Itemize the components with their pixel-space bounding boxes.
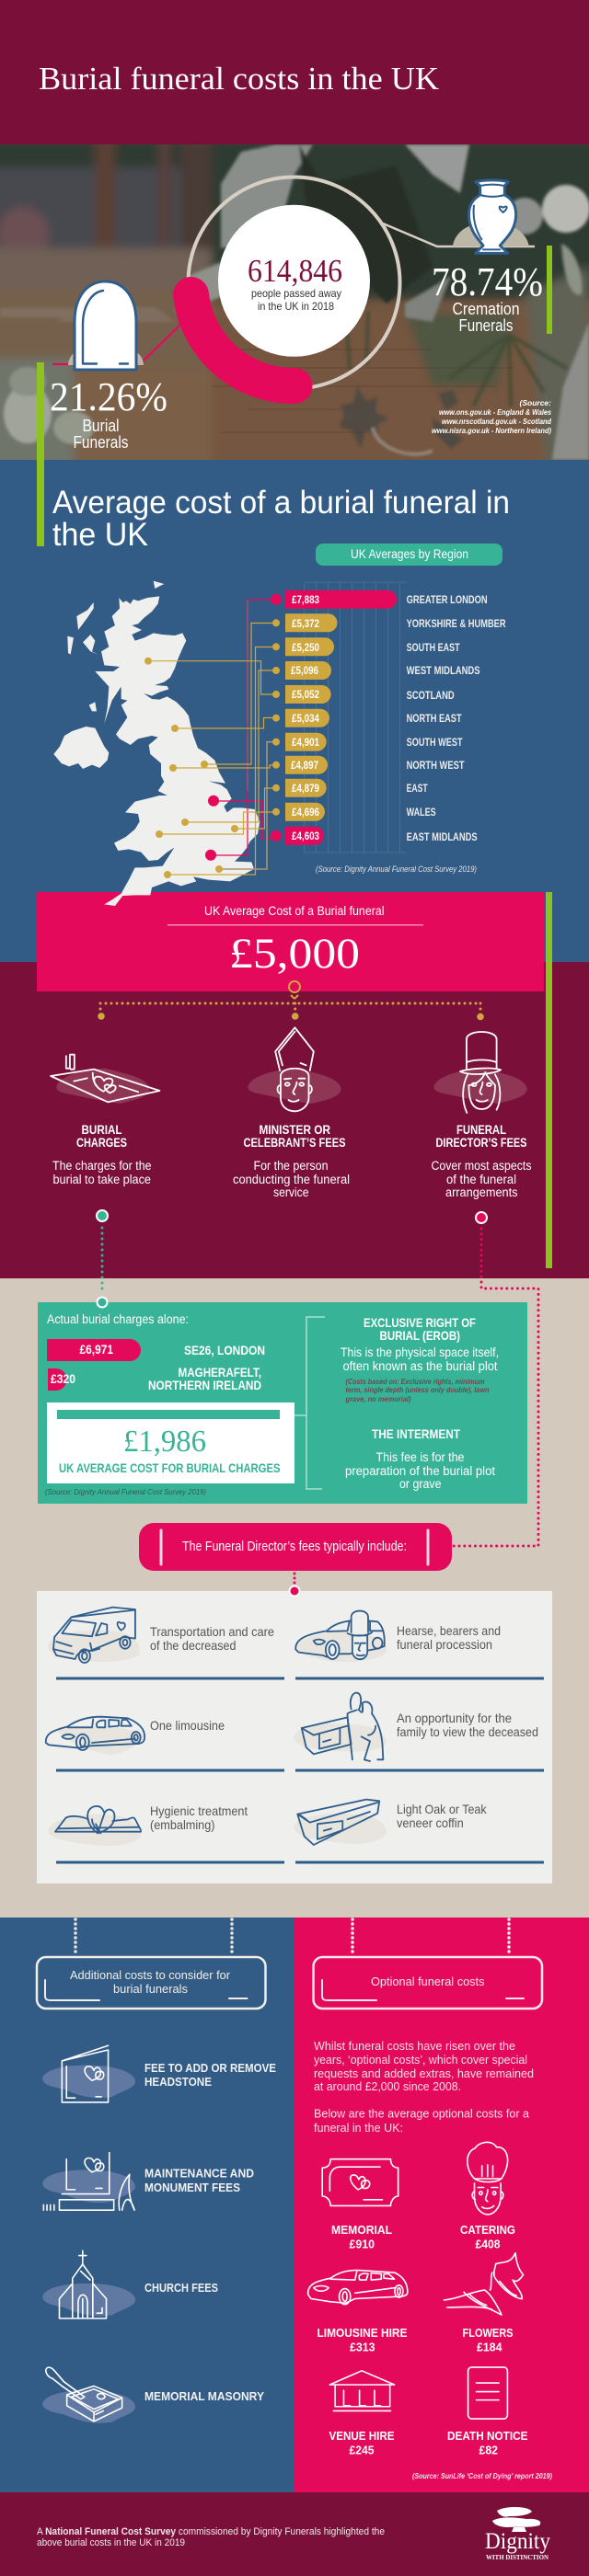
- bar chart: regions: YORKSHIRE & HUMBER: [407, 617, 506, 630]
- director fees: Cover most aspects: [431, 1159, 532, 1173]
- fee item text: of the decreased: [150, 1638, 236, 1653]
- pill: director fees: [139, 1523, 452, 1571]
- bar chart: regions: SCOTLAND: [407, 689, 455, 702]
- gold tree connector: [98, 981, 484, 1020]
- burial arc: [191, 294, 294, 386]
- additional cost labels: MONUMENT FEES: [144, 2181, 240, 2194]
- bar chart: regions: EAST MIDLANDS: [407, 830, 478, 843]
- optional cost labels: £82: [479, 2444, 498, 2457]
- region pill: UK Averages by Region: [351, 546, 468, 561]
- director fees: FUNERAL: [456, 1123, 506, 1137]
- bar chart: regions: £5,250: [292, 641, 319, 654]
- heading: average cost: Average cost of a burial funeral in: [52, 485, 510, 521]
- icon: limousine outline: [308, 2271, 408, 2305]
- fee item text: veneer coffin: [397, 1815, 464, 1830]
- fee item text: family to view the deceased: [397, 1724, 538, 1739]
- panel: additional costs: [0, 1918, 294, 2492]
- erob text: often known as the burial plot: [342, 1359, 498, 1373]
- icon: minister: [248, 1027, 341, 1111]
- interment text: THE INTERMENT: [372, 1426, 460, 1441]
- heading box: Additional costs to consider for: [70, 1969, 230, 1982]
- icon: church: [42, 2250, 135, 2318]
- fee item text: Hearse, bearers and: [397, 1623, 501, 1638]
- minister fees: conducting the funeral: [233, 1173, 350, 1186]
- fee item text: Transportation and care: [150, 1624, 274, 1639]
- intro text: at around £2,000 since 2008.: [314, 2080, 461, 2093]
- bar chart: regions: £4,879: [292, 782, 319, 795]
- bar chart: regions: £4,603: [292, 830, 319, 842]
- average cost card: UK AVERAGE COST FOR BURIAL CHARGES: [59, 1460, 280, 1475]
- average cost card: £1,986: [123, 1425, 206, 1459]
- survey note: A National Funeral Cost Survey commissioned by Dignity Funerals highlighted the: [37, 2526, 385, 2537]
- erob note: term, single depth (unless only double), lawn: [346, 1386, 490, 1394]
- bar: lowest: £320: [51, 1372, 75, 1386]
- minister fees: CELEBRANT’S FEES: [243, 1136, 346, 1150]
- bar chart: regions: £4,696: [292, 806, 319, 819]
- fee item text: Hygienic treatment: [150, 1803, 248, 1818]
- bar chart: regions: EAST: [407, 782, 428, 795]
- bar chart: regions: WEST MIDLANDS: [407, 664, 480, 677]
- cremation stat: Cremation: [453, 300, 519, 318]
- optional cost labels: LIMOUSINE HIRE: [317, 2327, 407, 2340]
- panel: funeral photo background: [0, 138, 589, 469]
- optional cost labels: FLOWERS: [462, 2327, 514, 2340]
- region pill: [316, 544, 502, 566]
- panel: optional costs: [294, 1918, 589, 2492]
- erob text: EXCLUSIVE RIGHT OF: [364, 1315, 476, 1330]
- bar chart: regions: £5,034: [292, 712, 319, 725]
- panel: UK average cost: [37, 892, 552, 1268]
- optional cost labels: £184: [477, 2341, 502, 2354]
- burial stat: 21.26%: [50, 374, 167, 419]
- bar: highest: £6,971: [79, 1343, 113, 1357]
- bar chart: regions: SOUTH EAST: [407, 641, 460, 654]
- optional cost labels: VENUE HIRE: [329, 2430, 394, 2443]
- panel: director fee items: [37, 1574, 552, 1883]
- minister fees: For the person: [254, 1159, 328, 1173]
- connector: cremation: [383, 223, 535, 246]
- erob text: [341, 1315, 499, 1373]
- fee item text: One limousine: [150, 1718, 225, 1733]
- logo: Dignity: Dignity: [485, 2529, 550, 2554]
- map connectors: [148, 600, 276, 875]
- bar chart: regions: NORTH WEST: [407, 759, 465, 772]
- icon: venue: [329, 2371, 395, 2410]
- heading box: [313, 1957, 542, 2009]
- cremation stat: 78.74%: [432, 259, 543, 304]
- total cost: £5,000: [229, 930, 360, 978]
- optional cost labels: MEMORIAL: [331, 2224, 392, 2237]
- heading: average cost: the UK: [52, 517, 148, 553]
- bar chart: regions: GREATER LONDON: [407, 593, 488, 606]
- optional cost labels: £910: [350, 2238, 375, 2251]
- icon: flower: [444, 2253, 524, 2315]
- bar chart: regions: SOUTH WEST: [407, 736, 463, 749]
- minister fees: service: [273, 1185, 309, 1199]
- panel: burial charges: [38, 1297, 527, 1504]
- bar: highest: SE26, LONDON: [184, 1343, 265, 1357]
- interment text: preparation of the burial plot: [345, 1464, 495, 1478]
- bar: lowest: MAGHERAFELT,: [179, 1365, 261, 1380]
- bar chart: regions: WALES: [407, 806, 436, 819]
- interment text: or grave: [399, 1477, 442, 1491]
- burial stat: Funerals: [74, 433, 129, 452]
- source: population data: www.ons.gov.uk - England & Wales: [439, 407, 551, 417]
- icon: death notice: [468, 2367, 507, 2419]
- intro text: funeral in the UK:: [314, 2122, 403, 2135]
- intro text: Whilst funeral costs have risen over the: [314, 2040, 515, 2053]
- burial charges: [52, 1123, 151, 1186]
- green bar heading: [37, 460, 44, 546]
- erob text: This is the physical space itself,: [341, 1345, 499, 1359]
- panel: footer: [0, 2492, 589, 2576]
- source: population data: www.nrscotland.gov.uk - Scotland: [442, 417, 552, 426]
- icon: embalming: [48, 1806, 141, 1846]
- panel: beige section: [0, 1278, 589, 1918]
- bar: highest: [47, 1339, 265, 1361]
- fee item text: funeral procession: [397, 1637, 492, 1652]
- green bar left: [37, 362, 44, 546]
- interment text: [345, 1426, 495, 1491]
- icon: chef: [468, 2142, 508, 2215]
- icon: memorial plaque: [322, 2159, 398, 2205]
- panel: maroon section: [0, 962, 589, 1278]
- icon: masonry: [42, 2367, 135, 2423]
- source: burial charges: (Source: Dignity Annual Funeral Cost Survey 2019): [45, 1487, 206, 1496]
- hanging dots: [352, 1919, 509, 1953]
- bar chart: regions: £4,897: [291, 759, 318, 772]
- erob text: BURIAL (EROB): [379, 1328, 460, 1343]
- logo: Dignity: [485, 2507, 550, 2561]
- average cost card: [47, 1402, 294, 1483]
- additional cost labels: [144, 2062, 276, 2403]
- erob note: grave, no memorial): [345, 1395, 411, 1403]
- burial charges: BURIAL: [81, 1123, 121, 1137]
- bar chart: regions: £4,901: [292, 736, 319, 749]
- bar chart: regions: £5,372: [292, 617, 319, 630]
- hanging dots: [75, 1919, 232, 1953]
- map: United Kingdom: [53, 581, 260, 906]
- fee item text: An opportunity for the: [397, 1711, 512, 1725]
- people caption: [251, 287, 341, 313]
- additional cost labels: CHURCH FEES: [144, 2282, 218, 2295]
- bracket: [294, 1317, 325, 1489]
- icon: limousine: [46, 1717, 144, 1755]
- map and chart dots: [144, 594, 282, 878]
- chart: deaths circle: [52, 177, 535, 388]
- green bar right: [547, 246, 552, 334]
- heading box: burial funerals: [113, 1983, 188, 1996]
- additional cost labels: FEE TO ADD OR REMOVE: [144, 2062, 276, 2075]
- optional cost labels: £245: [350, 2444, 375, 2457]
- heading: average cost: [37, 460, 510, 553]
- bar chart: regions: £5,052: [292, 688, 319, 701]
- people caption: in the UK in 2018: [258, 300, 334, 313]
- icon: burial plot: [51, 1055, 159, 1104]
- source: optional costs: (Source: SunLife ‘Cost of Dying’ report 2019): [412, 2471, 552, 2480]
- burial stat: [37, 362, 167, 546]
- connector: burial charges to teal box: [97, 1210, 108, 1292]
- panel: average cost section: [0, 460, 589, 962]
- intro text: [314, 2040, 534, 2135]
- burial charges: The charges for the: [52, 1159, 151, 1173]
- minister fees: [233, 1123, 350, 1199]
- optional cost labels: [317, 2224, 528, 2457]
- icon: headstone: [42, 2045, 135, 2102]
- icon: funeral director: [433, 1032, 527, 1113]
- survey note: [37, 2526, 385, 2548]
- bar: lowest: NORTHERN IRELAND: [148, 1378, 261, 1392]
- icon: monument: [42, 2153, 135, 2210]
- panel: UK average cost: UK Average Cost of a Burial funeral: [204, 903, 385, 918]
- interment text: This fee is for the: [375, 1450, 464, 1464]
- source: population data: www.nisra.gov.uk - Northern Ireland): [432, 426, 551, 435]
- fee item text: Light Oak or Teak: [397, 1802, 487, 1816]
- source: population data: (Source:: [520, 398, 551, 407]
- bar chart: regions: £7,883: [292, 593, 319, 606]
- ring: [188, 177, 399, 388]
- erob note: (Costs based on: Exclusive rights, minimum: [346, 1378, 484, 1386]
- photo tip below band: [79, 460, 119, 476]
- heading box: [37, 1957, 265, 2009]
- minister fees: MINISTER OR: [260, 1123, 330, 1137]
- green bar right edge: [546, 892, 552, 1268]
- optional cost labels: CATERING: [460, 2224, 515, 2237]
- source: regional data: (Source: Dignity Annual Funeral Cost Survey 2019): [316, 864, 477, 874]
- burial stat: Burial: [83, 417, 120, 435]
- cremation stat: [432, 246, 552, 335]
- pill: director fees: The Funeral Director’s fees typically include:: [182, 1540, 407, 1554]
- title: Burial funeral costs in the UK: [39, 61, 439, 97]
- cost categories text: [52, 1123, 532, 1199]
- additional cost labels: MAINTENANCE AND: [144, 2167, 254, 2180]
- icon: urn: [453, 180, 529, 253]
- director fees: DIRECTOR’S FEES: [436, 1136, 526, 1150]
- burial charges: burial to take place: [53, 1173, 151, 1186]
- icon: hearse and director: [294, 1611, 387, 1662]
- optional cost labels: £408: [475, 2238, 501, 2251]
- bar chart: regions: [285, 582, 506, 853]
- connector: burial: [52, 324, 181, 364]
- bar: lowest: [48, 1365, 261, 1392]
- connector: director fees to pill: [453, 1212, 538, 1546]
- burial charges: CHARGES: [76, 1136, 127, 1150]
- fee item text: [150, 1623, 538, 1832]
- heading box: Optional funeral costs: [371, 1975, 484, 1988]
- fee item text: (embalming): [150, 1817, 215, 1832]
- additional cost labels: HEADSTONE: [144, 2076, 212, 2089]
- survey note: above burial costs in the UK in 2019: [37, 2537, 185, 2548]
- icon: coffin: [294, 1800, 387, 1845]
- icon: ambulance: [48, 1608, 140, 1663]
- bar chart: regions: NORTH EAST: [407, 712, 462, 725]
- director fees: of the funeral: [446, 1173, 516, 1186]
- people count: 614,846: [248, 253, 342, 289]
- logo: Dignity: WITH DISTINCTION: [486, 2554, 549, 2561]
- icon: gravestone: [68, 281, 144, 370]
- optional cost labels: DEATH NOTICE: [447, 2430, 528, 2443]
- additional cost labels: MEMORIAL MASONRY: [144, 2390, 265, 2403]
- people caption: people passed away: [251, 287, 341, 300]
- cremation stat: Funerals: [458, 316, 514, 335]
- intro text: years, ‘optional costs’, which cover special: [314, 2054, 527, 2067]
- white centre: [218, 205, 370, 357]
- header band: [0, 0, 589, 144]
- optional cost labels: £313: [350, 2341, 375, 2354]
- bar chart: regions: £5,096: [291, 664, 318, 677]
- director fees: arrangements: [445, 1185, 518, 1199]
- erob note: [345, 1378, 490, 1403]
- intro text: Below are the average optional costs for a: [314, 2108, 529, 2121]
- intro text: requests and added extras, have remained: [314, 2067, 534, 2080]
- panel: burial charges: Actual burial charges alone:: [47, 1312, 189, 1326]
- director fees: [431, 1123, 532, 1199]
- source: population data: [432, 398, 552, 435]
- icon: family viewing coffin: [294, 1693, 387, 1761]
